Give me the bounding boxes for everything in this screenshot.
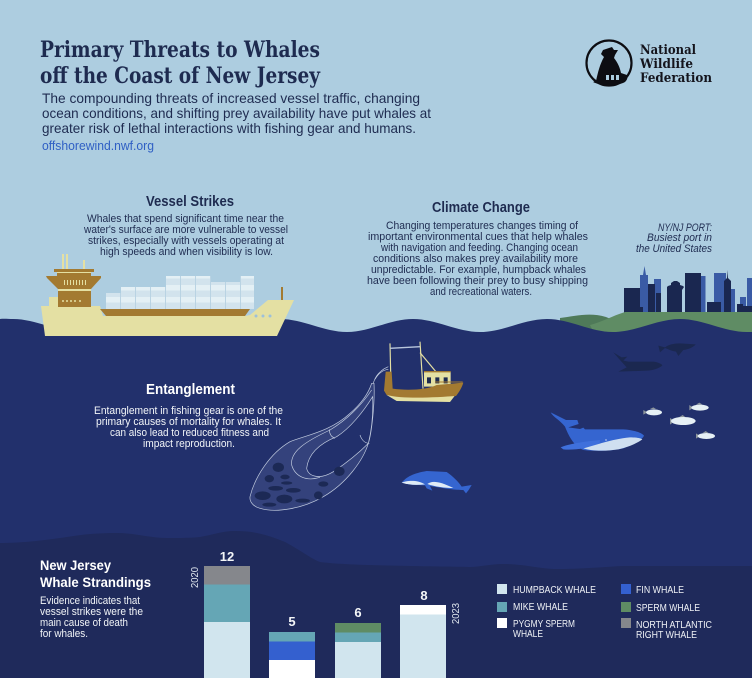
logo: National Wildlife Federation: Wildlife (639, 57, 693, 72)
bar 2022: 6 (354, 605, 362, 620)
entanglement heading: Entanglement (146, 382, 235, 398)
bar 2021: 5 (288, 614, 296, 629)
cargo containers (106, 276, 254, 309)
strandings heading: Whale Strandings (40, 574, 151, 590)
title: off the Coast of New Jersey (40, 63, 321, 89)
logo: National Wildlife Federation: Federation (640, 71, 712, 86)
legend: SPERM WHALE (636, 603, 700, 614)
small dark whale (658, 343, 696, 356)
port callout (636, 222, 712, 255)
legend: PYGMY SPERM (513, 619, 575, 630)
legend (497, 584, 712, 641)
minke whale (402, 471, 472, 493)
bar 2021 (269, 614, 315, 678)
strandings panel background (0, 531, 752, 678)
bar 2022 (335, 605, 381, 678)
entanglement text (94, 405, 283, 450)
intro text: The compounding threats of increased vessel traffic, changing (42, 90, 420, 106)
cargo ship (41, 254, 294, 336)
superstructure (46, 254, 101, 307)
port callout: NY/NJ PORT: (658, 222, 712, 234)
fishing boat (384, 342, 463, 402)
logo: National Wildlife Federation (586, 40, 712, 86)
strandings text: vessel strikes were the (40, 606, 143, 618)
climate change text: with navigation and feeding. Changing ocean (380, 242, 578, 254)
legend: NORTH ATLANTIC (636, 620, 712, 631)
website link: offshorewind.nwf.org (42, 138, 154, 153)
climate change text: have been following their prey to busy shipping (367, 275, 588, 287)
legend: RIGHT WHALE (636, 630, 697, 641)
large dark whale (613, 352, 662, 372)
strandings text: for whales. (40, 628, 88, 640)
climate change text: important environmental cues that help whales (368, 231, 588, 243)
strandings text: Evidence indicates that (40, 595, 141, 607)
hull portholes (254, 314, 272, 318)
land (560, 312, 752, 345)
vessel strikes text: water's surface are more vulnerable to vessel (83, 224, 288, 236)
intro text (42, 90, 431, 136)
fishing net (250, 367, 388, 510)
climate change text (367, 220, 588, 298)
strandings heading (40, 557, 151, 590)
climate change text: unpredictable. For example, humpback whales (371, 264, 586, 276)
strandings heading: New Jersey (40, 557, 111, 573)
humpback whale (551, 412, 644, 451)
port callout: Busiest port in (647, 232, 712, 244)
intro text: greater risk of lethal interactions with fishing gear and humans. (42, 120, 416, 136)
legend: FIN WHALE (636, 585, 684, 596)
bar 2023: 8 (420, 588, 428, 603)
bar chart (190, 549, 462, 678)
fish in net (255, 463, 345, 507)
school of fish (643, 403, 715, 439)
deck (100, 309, 250, 316)
climate change text: conditions also makes prey availability more (373, 253, 578, 265)
vessel strikes text: high speeds and when visibility is low. (100, 246, 273, 258)
bar 2020 (190, 549, 250, 678)
ship hull (41, 300, 294, 336)
legend: HUMPBACK WHALE (513, 585, 596, 596)
bar 2023 (400, 588, 462, 678)
entanglement text: Entanglement in fishing gear is one of the (94, 405, 283, 417)
legend: WHALE (513, 629, 543, 640)
title: Primary Threats to Whales (40, 37, 320, 63)
title (40, 37, 321, 89)
bar 2020: 12 (220, 549, 234, 564)
ship mast (281, 287, 283, 300)
climate change heading: Climate Change (432, 200, 530, 216)
bar 2023: 2023 (451, 603, 462, 624)
entanglement text: primary causes of mortality for whales. It (96, 416, 282, 428)
vessel strikes heading: Vessel Strikes (146, 194, 234, 210)
vessel strikes text: Whales that spend significant time near the (87, 213, 284, 225)
entanglement text: can also lead to reduced fitness and (110, 427, 269, 439)
city skyline (624, 266, 752, 313)
climate change text: Changing temperatures changes timing of (386, 220, 579, 232)
legend: MIKE WHALE (513, 602, 568, 613)
logo: National Wildlife Federation: National (640, 43, 696, 58)
ocean (0, 319, 752, 678)
intro text: ocean conditions, and shifting prey availability have put whales at (42, 105, 431, 121)
climate change text: and recreational waters. (430, 286, 532, 298)
vessel strikes text: strikes, especially with vessels operating at (88, 235, 285, 247)
port callout: the United States (636, 243, 712, 255)
strandings text: main cause of death (40, 617, 128, 629)
bar 2020: 2020 (190, 567, 201, 588)
entanglement text: impact reproduction. (143, 438, 235, 450)
strandings text (40, 595, 143, 640)
vessel strikes text (83, 213, 288, 258)
